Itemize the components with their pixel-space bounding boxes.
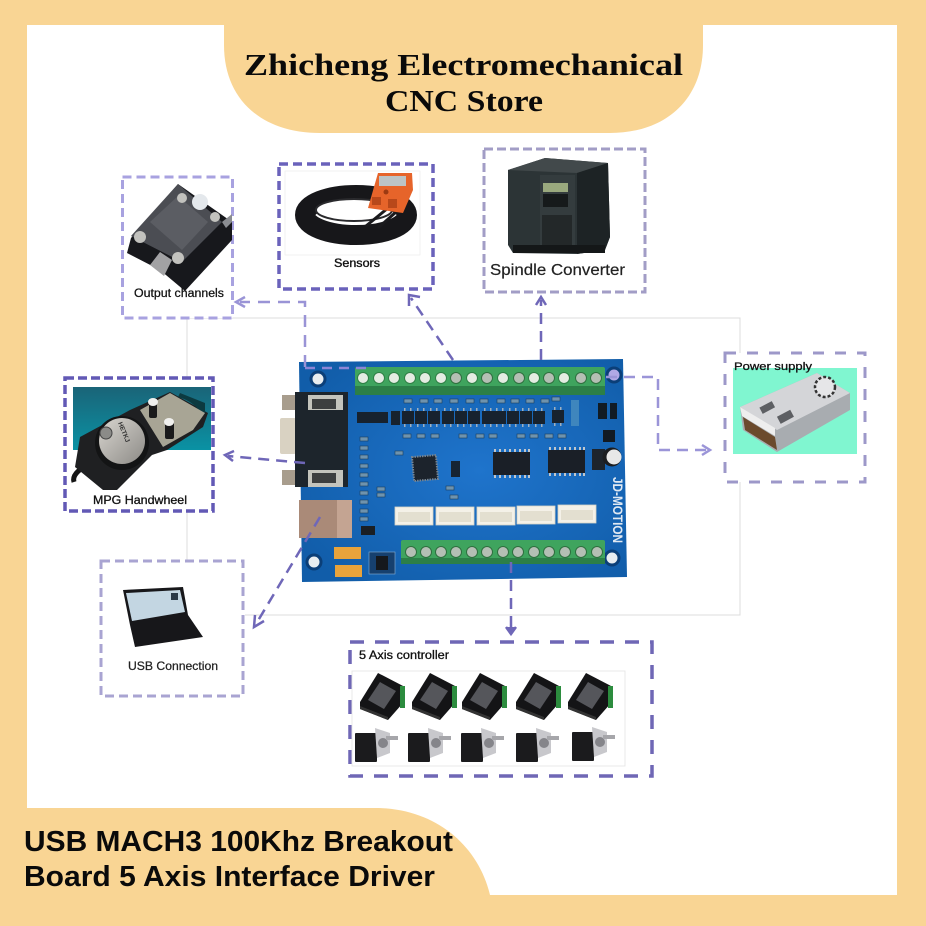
icons: stepper motors <box>355 727 615 762</box>
panel: USB connection <box>101 561 243 696</box>
title banner <box>224 0 703 133</box>
DB9 connector <box>280 392 348 487</box>
icon: sensor cable coil <box>305 173 413 235</box>
icon: laptop <box>123 587 203 647</box>
title banner: CNC Store <box>385 84 543 118</box>
regulator <box>603 430 615 442</box>
USB socket <box>299 500 352 538</box>
arrow: to output channels <box>236 297 370 368</box>
faint connector frame <box>187 318 740 615</box>
MCU chip <box>412 455 438 481</box>
arrow: to MPG handwheel <box>225 451 305 463</box>
JST connectors <box>395 505 596 525</box>
mounting holes <box>307 368 621 569</box>
label: MPG handwheel: MPG Handwheel <box>93 493 187 507</box>
panel: output channels <box>122 177 232 318</box>
title banner: Zhicheng Electromechanical <box>244 48 683 82</box>
panel: MPG handwheel <box>65 378 213 511</box>
panel: spindle converter <box>484 149 645 292</box>
arrow: to sensors <box>409 295 453 360</box>
top terminal block <box>355 367 605 395</box>
arrow: to 5 axis controller <box>506 562 516 634</box>
arrow: to power supply <box>606 377 710 455</box>
label: spindle converter: Spindle Converter <box>490 262 625 279</box>
tantalum capacitors <box>334 547 362 577</box>
arrow: to spindle converter <box>536 297 546 360</box>
icon: solid state relay <box>127 184 232 291</box>
panel: sensors <box>279 164 433 289</box>
bottom terminal block <box>401 540 605 564</box>
icon: handwheel: HETKJ <box>116 421 131 444</box>
driver ICs <box>493 447 585 478</box>
label: USB connection: USB Connection <box>128 659 218 673</box>
product title banner: USB MACH3 100Khz Breakout <box>24 826 453 858</box>
small resistors <box>360 397 566 521</box>
panel: 5 axis controller <box>350 642 652 776</box>
circuit board <box>280 359 627 582</box>
label: output channels: Output channels <box>134 288 224 300</box>
icon: handwheel <box>74 392 208 490</box>
icons: stepper drivers <box>360 673 613 720</box>
voltage regulator <box>369 552 395 574</box>
product title banner <box>0 808 490 926</box>
panel: power supply <box>725 353 865 482</box>
optocoupler row <box>357 400 617 427</box>
label: 5 axis controller: 5 Axis controller <box>359 650 449 662</box>
arrow: to USB connection <box>254 517 320 627</box>
icon: power supply unit <box>740 373 850 452</box>
label: sensors: Sensors <box>334 258 380 270</box>
label: power supply: Power supply <box>734 361 813 373</box>
capacitor <box>592 448 622 470</box>
product title banner: Board 5 Axis Interface Driver <box>24 861 435 893</box>
icon: inverter <box>508 158 610 254</box>
board label: JD-MOTION <box>610 477 625 543</box>
